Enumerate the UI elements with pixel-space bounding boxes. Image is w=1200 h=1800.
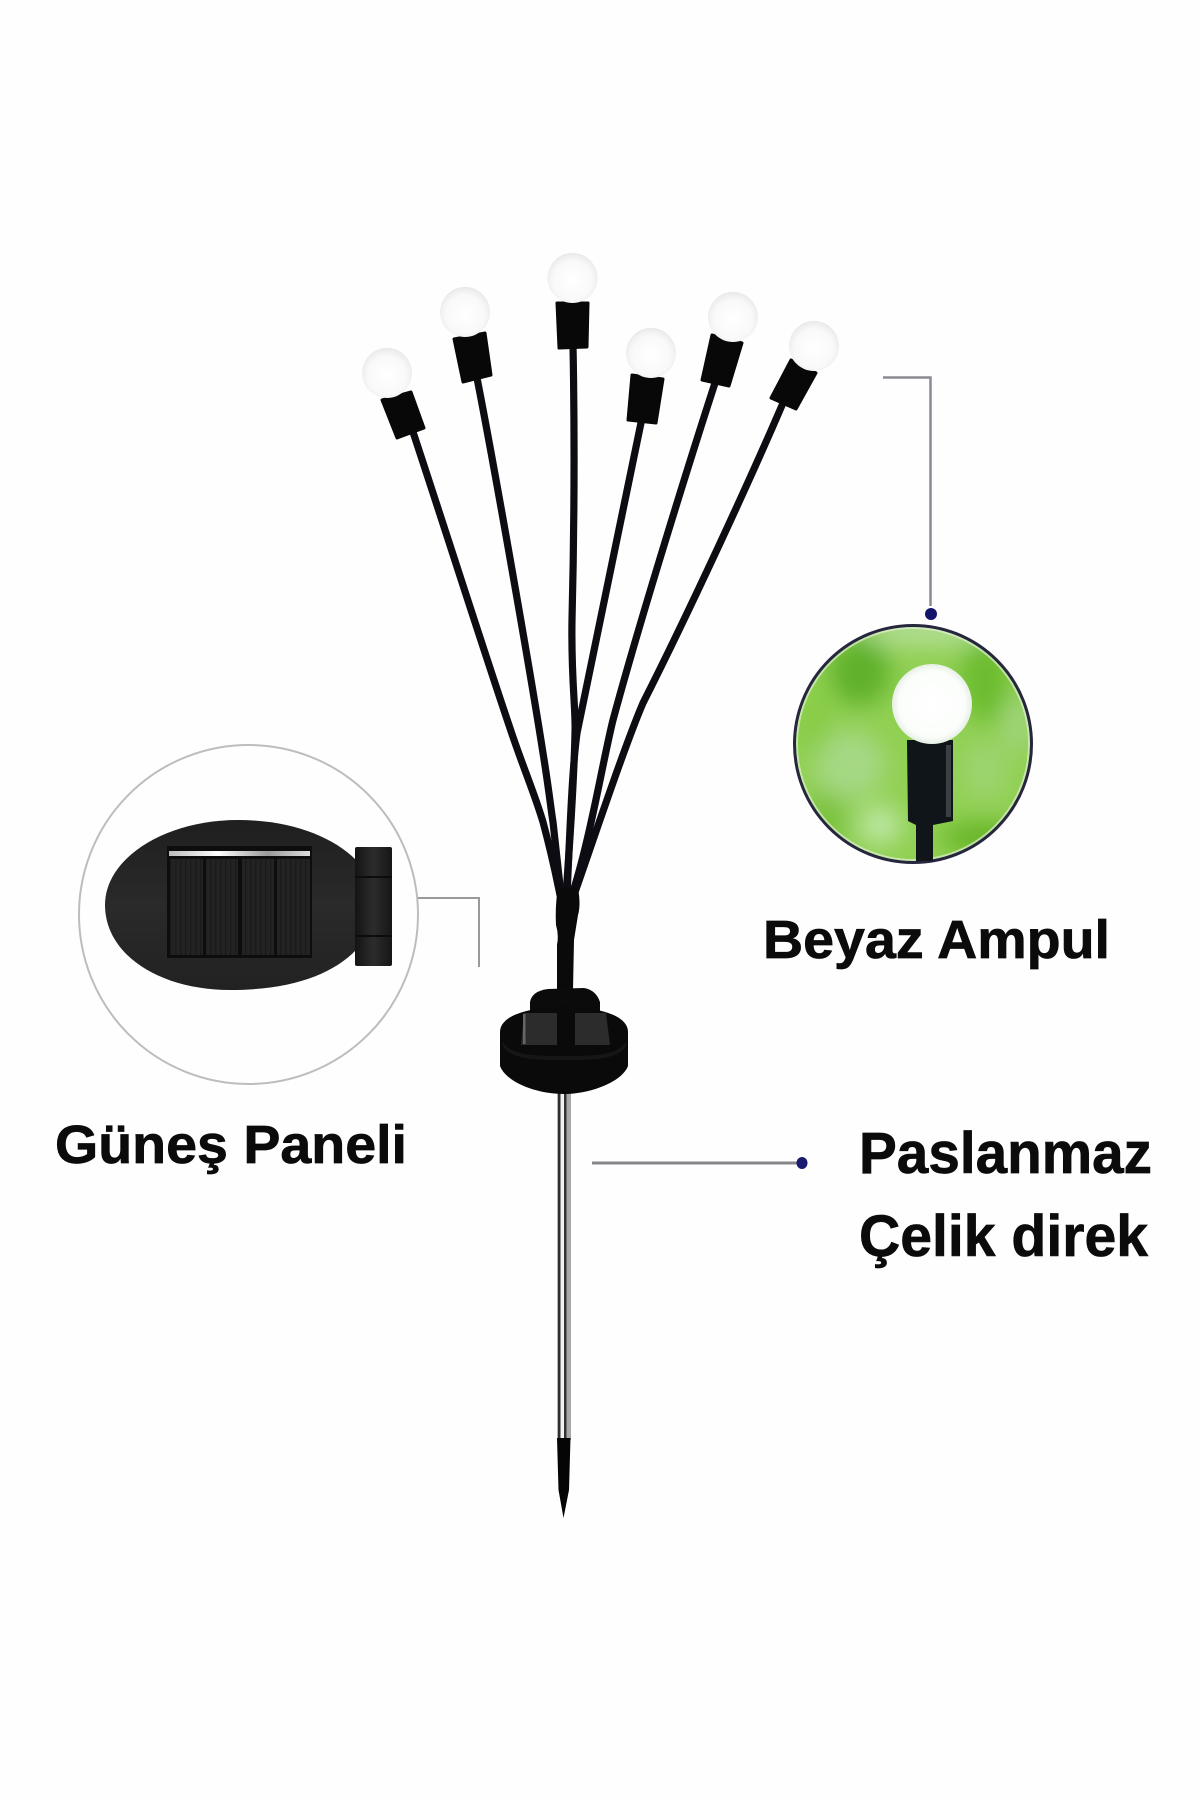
- bulb 2: [440, 287, 491, 382]
- label: Paslanmaz Çelik direk: Paslanmaz: [859, 1121, 1152, 1186]
- bulb 1: [362, 348, 424, 438]
- solar panel drawing: [105, 820, 392, 990]
- leader dot: [796, 1157, 808, 1169]
- label: Paslanmaz Çelik direk: Çelik direk: [859, 1204, 1149, 1269]
- bulb detail circle: [794, 618, 1032, 862]
- leader line: [883, 378, 930, 606]
- label: Güneş Paneli: Güneş Paneli: [55, 1115, 407, 1175]
- leader dot: [925, 608, 937, 620]
- stainless steel rod: [557, 1090, 571, 1440]
- lamp: six-bulb firefly stake light: [362, 253, 839, 1518]
- bulb 5: [702, 292, 758, 386]
- bulb 3: [548, 253, 598, 348]
- solar base: [500, 888, 628, 1094]
- wires: six flexible black stems: [413, 345, 783, 895]
- callout: stainless steel pole: [592, 1121, 1152, 1269]
- callout: white bulb: [763, 378, 1110, 970]
- inner glowing bulb: [892, 664, 972, 744]
- leader line: [592, 1162, 798, 1164]
- bulb 6: [771, 321, 839, 409]
- label: Beyaz Ampul: Beyaz Ampul: [763, 910, 1110, 970]
- infographic canvas: [56, 253, 1150, 1518]
- leader line: [418, 898, 479, 967]
- rod spike tip: [557, 1438, 570, 1518]
- inner socket: [907, 740, 953, 861]
- label: Paslanmaz Çelik direk: [859, 1121, 1152, 1269]
- callout: solar panel: [55, 745, 479, 1175]
- bulb 4: [626, 328, 676, 423]
- panel detail circle: [79, 745, 418, 1084]
